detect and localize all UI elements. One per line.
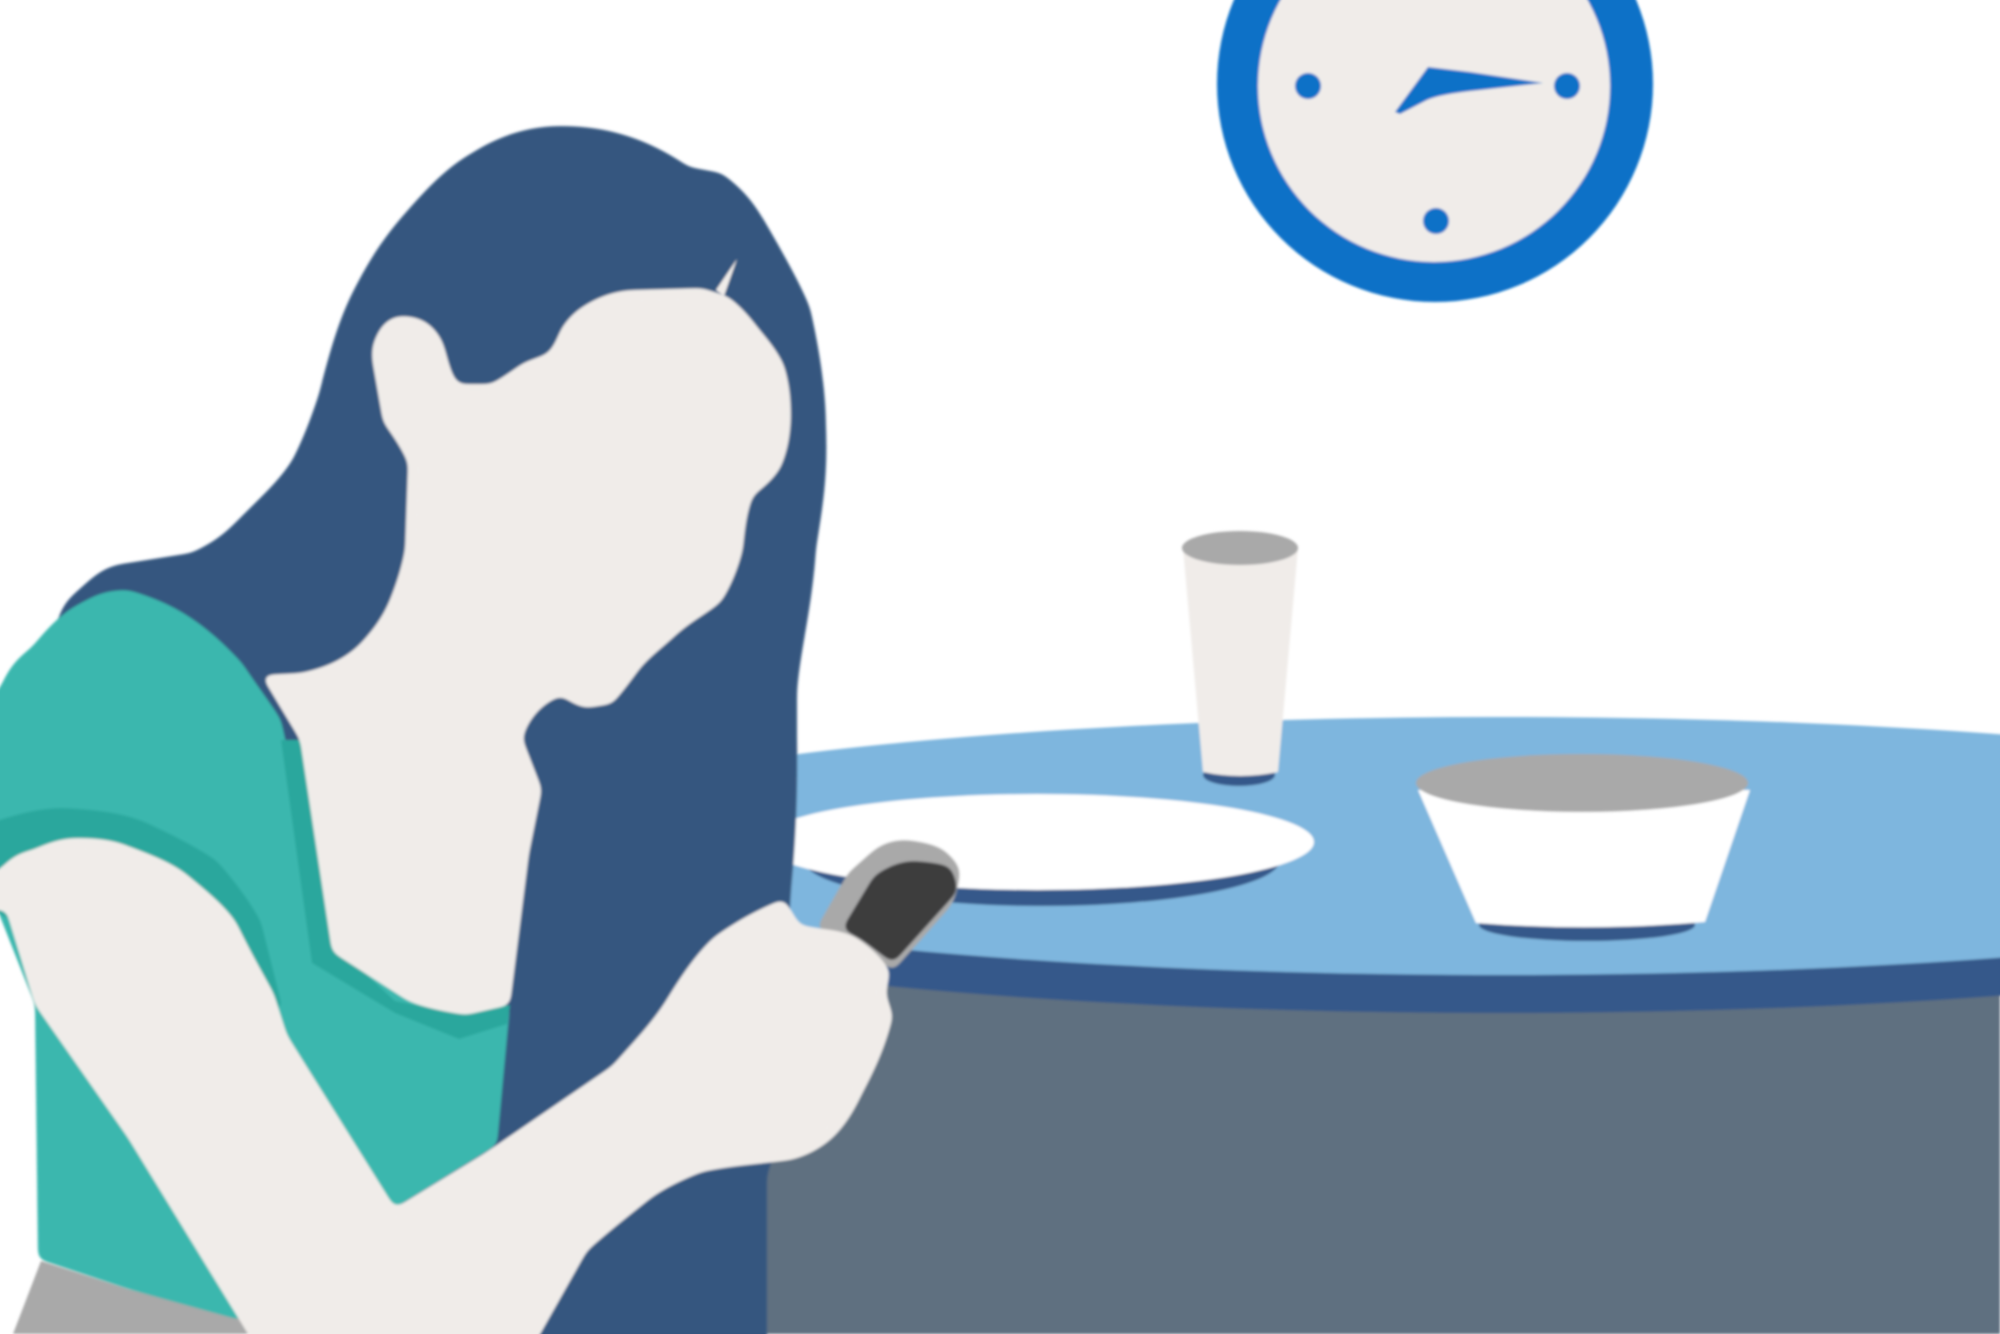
table [500,717,2000,1334]
arm and hand [0,838,893,1334]
pants [13,1261,300,1334]
bowl [1416,754,1750,941]
hair [57,126,826,1334]
glass [1182,531,1298,786]
phone [816,840,960,971]
plate [760,794,1314,906]
shirt [0,590,510,1320]
head and neck [261,259,791,1015]
icon: wall clock [1217,0,1653,302]
